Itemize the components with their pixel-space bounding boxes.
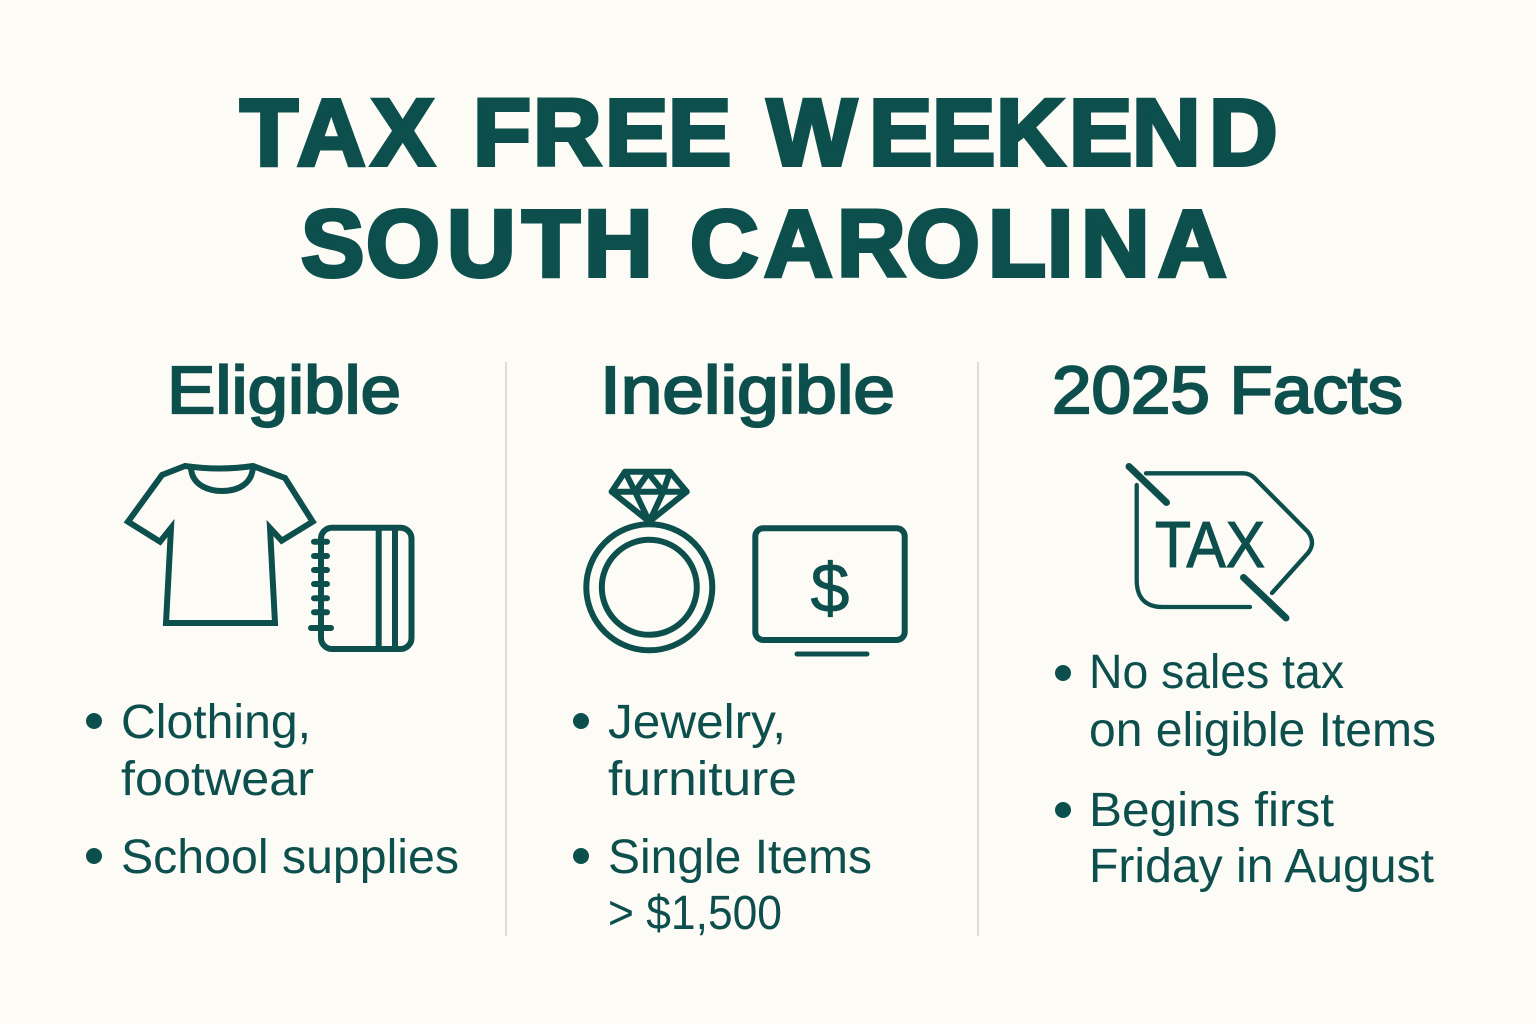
panel: ineligible	[573, 353, 905, 940]
list: facts: Begins first	[1089, 784, 1334, 837]
list: facts: Friday in August	[1089, 840, 1434, 893]
icon: monitor with price: $	[811, 549, 849, 627]
list: facts: on eligible Items	[1089, 704, 1436, 757]
icon: monitor with price	[755, 528, 905, 654]
list: facts	[1055, 646, 1436, 893]
list: facts: No sales tax	[1089, 646, 1344, 699]
list: ineligible items: Single Items	[608, 831, 872, 884]
icon: diamond ring	[586, 472, 712, 650]
title: SOUTH CAROLINA	[301, 191, 1227, 297]
list: eligible items: School supplies	[121, 831, 459, 884]
icon: crossed-out tax tag: TAX	[1155, 508, 1265, 581]
panel: 2025 facts	[1052, 353, 1436, 893]
panel: eligible	[86, 353, 459, 884]
list: eligible items	[86, 696, 459, 884]
icon: crossed-out tax tag	[1129, 466, 1312, 618]
list: ineligible items: > $1,500	[608, 887, 782, 940]
heading: eligible: Eligible	[167, 353, 401, 428]
list: ineligible items: furniture	[608, 753, 797, 806]
list: ineligible items	[573, 696, 872, 940]
icon: t-shirt	[128, 466, 313, 623]
heading: 2025 facts: 2025 Facts	[1052, 353, 1403, 428]
title	[240, 80, 1278, 297]
list: eligible items: footwear	[121, 753, 314, 806]
heading: ineligible: Ineligible	[600, 353, 895, 428]
title: TAX FREE WEEKEND	[240, 80, 1278, 186]
icon: notebook	[311, 528, 412, 649]
list: eligible items: Clothing,	[121, 696, 311, 749]
list: ineligible items: Jewelry,	[608, 696, 786, 749]
